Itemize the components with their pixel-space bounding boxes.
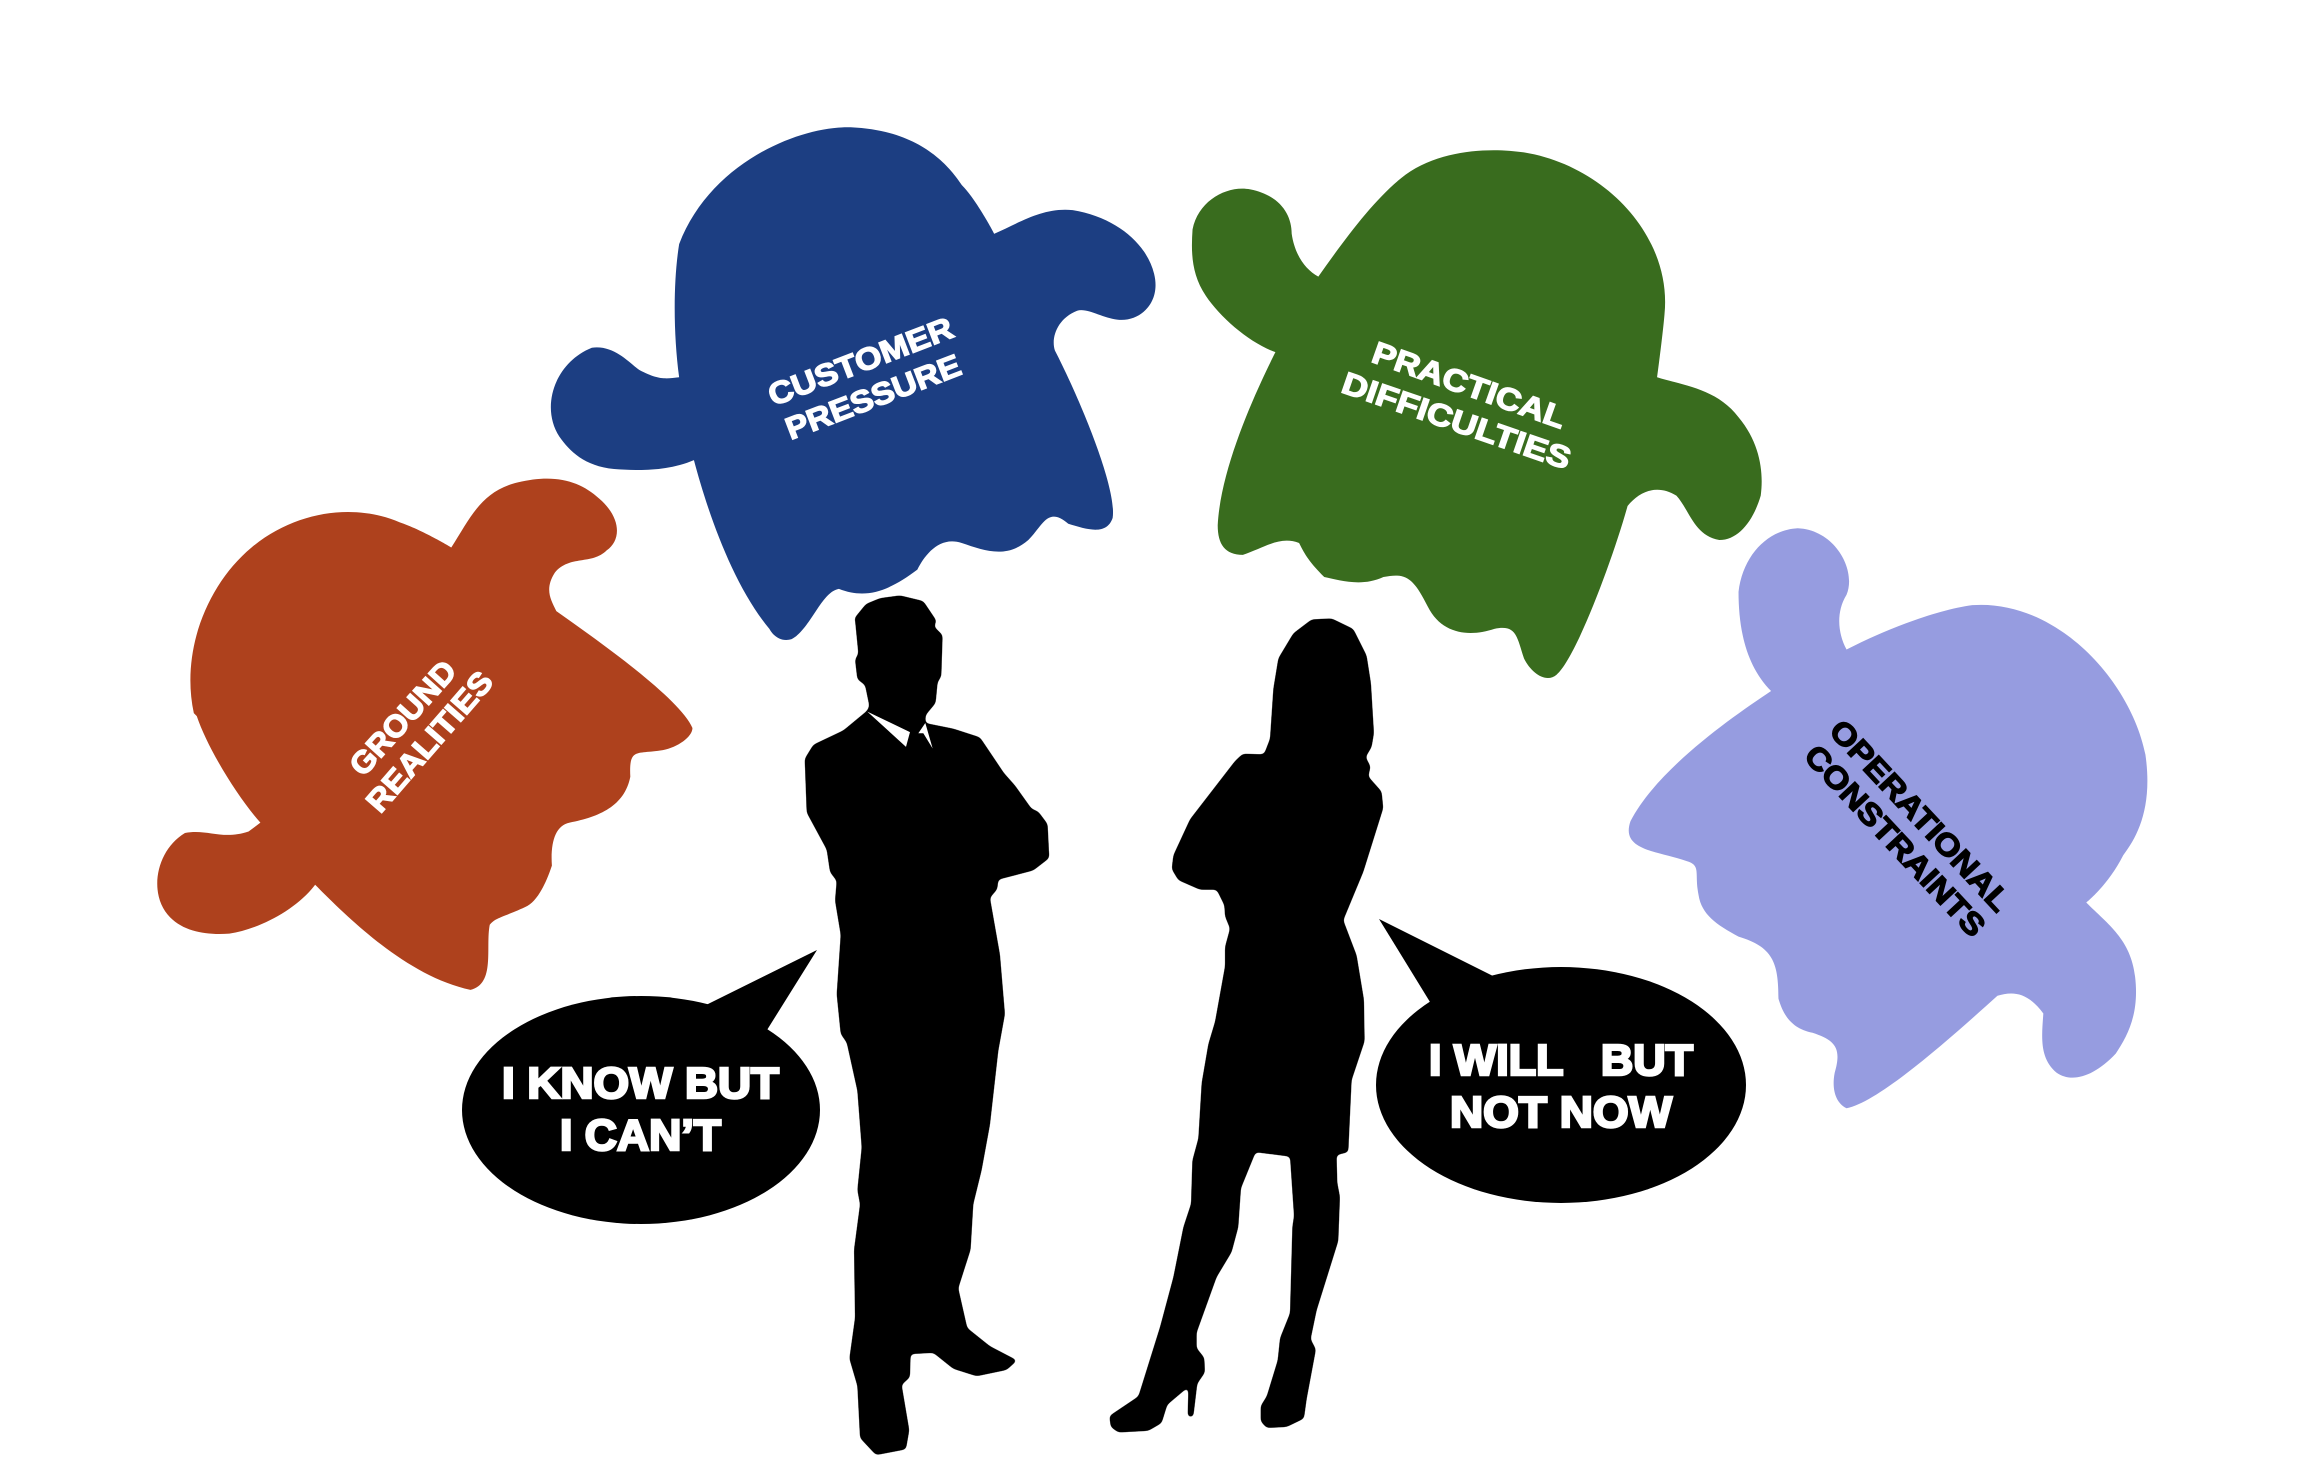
label: practical difficulties: DIFFICULTIES xyxy=(1337,365,1575,476)
label: practical difficulties xyxy=(1337,335,1575,476)
blob: customer pressure xyxy=(551,127,1156,640)
label: customer pressure: PRESSURE xyxy=(781,348,966,447)
speech bubble: I know but I can't: I CAN’T xyxy=(560,1111,721,1160)
speech bubble: I know but I can't: I KNOW BUT xyxy=(502,1059,779,1108)
blob: practical difficulties xyxy=(1192,150,1762,678)
label: ground realities: GROUND xyxy=(342,654,463,782)
label: customer pressure: CUSTOMER xyxy=(763,310,958,413)
label: operational constraints: CONSTRAINTS xyxy=(1797,738,1992,944)
blob: operational constraints xyxy=(1629,528,2147,1108)
speech bubble: I will but not now: I WILL BUT xyxy=(1429,1036,1693,1085)
label: operational constraints xyxy=(1797,713,2018,944)
label: practical difficulties: PRACTICAL xyxy=(1368,335,1570,436)
silhouette: woman xyxy=(1109,618,1383,1432)
speech bubble: I will but not now xyxy=(1376,919,1746,1203)
label: ground realities: REALITIES xyxy=(359,664,500,819)
label: operational constraints: OPERATIONAL xyxy=(1823,713,2018,919)
blob: ground realities xyxy=(157,479,692,990)
speech bubble: I will but not now: NOT NOW xyxy=(1450,1088,1672,1137)
label: customer pressure xyxy=(763,310,966,447)
silhouette: man xyxy=(805,595,1049,1455)
speech bubble: I know but I can't xyxy=(462,950,820,1224)
